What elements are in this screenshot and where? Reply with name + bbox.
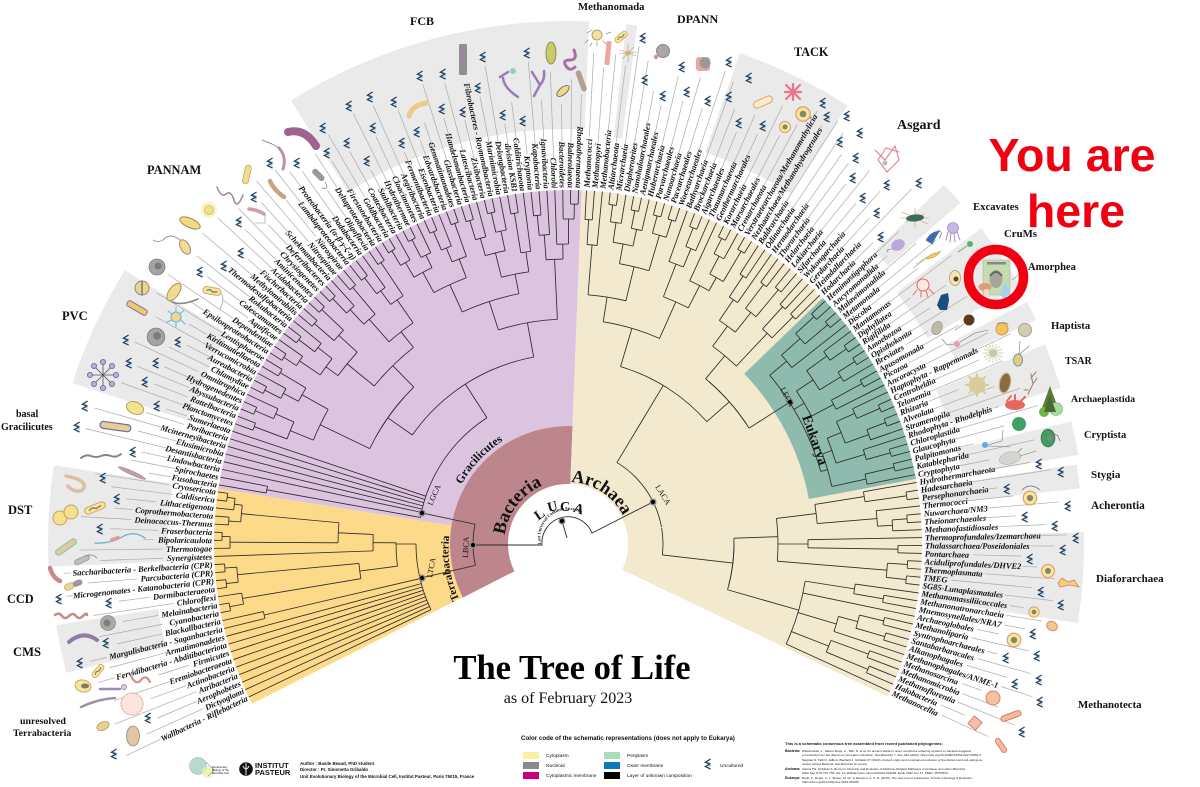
labels: Gracilicutes phyla: Desantisbacteria — [164, 444, 223, 466]
heading: unresolved Terrabacteria: Terrabacteria — [13, 728, 71, 739]
labels: Eukarya lineages: Ancoracysta — [884, 361, 927, 389]
panel: you-are-here portrait — [978, 260, 1022, 300]
heading: clade ring names: LGCA — [426, 483, 443, 507]
labels: Terrabacteria phyla: Armatimonadetes — [163, 633, 226, 658]
panel: tree sectors — [159, 141, 958, 704]
labels: Gracilicutes phyla: Elusimicrobia — [174, 437, 225, 458]
heading: clade ring names: Terrabacteria — [441, 536, 459, 602]
labels: Eukarya lineages: Rigifilida — [859, 321, 892, 347]
text block: references: Witwinowski, J., Sartori-Rupp, A., Taib, N. et al. An ancient divide in outer membrane tethering systems in bacteria suggests — [802, 749, 971, 753]
labels: lower Archaea lineages: Persephonarchaeia — [921, 485, 989, 503]
labels: Eukarya lineages: Breviates — [873, 343, 906, 367]
labels: Gracilicutes phyla: Deferribacteres — [283, 242, 327, 288]
labels: upper Archaea lineages: Thorarchaeia — [776, 216, 812, 259]
heading: clade ring names: LBCA — [461, 536, 471, 558]
logo: Institut Pasteur — [239, 761, 291, 777]
labels: Terrabacteria phyla: Fraserbacteria — [160, 526, 212, 537]
text block: references: This is a schematic consensus tree assembled from recent published phylogenies: — [785, 741, 943, 746]
labels: upper Archaea lineages: Nanohaloarchaeales — [630, 122, 653, 195]
legend: colour code: Cytoplasm — [546, 753, 569, 759]
heading: PANNAM: PANNAM — [147, 163, 201, 177]
labels: Gracilicutes phyla: Verrucomicrobia — [203, 341, 258, 377]
labels: Gracilicutes phyla: Balneolaeota — [566, 141, 575, 188]
labels: Gracilicutes phyla: Dependentiae — [230, 315, 275, 349]
labels: Gracilicutes phyla: Edwardsbacteria — [421, 153, 449, 211]
heading: Haptista: Haptista — [1051, 320, 1091, 332]
labels: lower Archaea lineages — [784, 458, 1067, 741]
heading: TACK: TACK — [794, 45, 829, 59]
labels: Gracilicutes phyla: Thermodesulfobacteria — [226, 266, 294, 323]
heading: clade ring names: Gracilicutes — [456, 436, 502, 483]
labels: Terrabacteria phyla: Melainabacteria — [160, 601, 218, 620]
labels: Terrabacteria phyla: Saccharibacteria - Berkelbacteria (CPR) — [72, 561, 213, 578]
labels: Gracilicutes phyla: Rokubacteria — [246, 293, 289, 330]
heading: Amorphea: Amorphea — [1028, 262, 1077, 273]
labels: Terrabacteria phyla: Synergistetes — [167, 553, 212, 563]
text block: authors — [300, 761, 475, 779]
labels: upper Archaea lineages: Heimdallarchaeia — [813, 240, 863, 292]
labels: Eukarya lineages: Ancyromonadida — [830, 262, 880, 309]
labels: Gracilicutes phyla: Rhodothermaeota — [574, 125, 584, 188]
labels: Gracilicutes phyla: Chrysiogenetes — [278, 250, 321, 293]
labels: upper Archaea lineages: Diapherotrites — [622, 142, 640, 194]
labels: Gracilicutes phyla: Chlamydiae — [209, 364, 251, 391]
text block: references: Garcia PS, Gribaldo S, Borrel G. Diversity and Evolution of Methane-Related Pathways in Archaea. Annu Rev Microbiol. — [802, 767, 966, 771]
labels: Terrabacteria phyla: Microgenomates - Katanobacteria (CPR) — [72, 577, 215, 601]
heading: PVC: PVC — [62, 309, 88, 323]
labels: lower Archaea lineages: Archaeoglobales — [915, 613, 975, 634]
labels: lower Archaea lineages: Methanoliparia — [914, 621, 969, 642]
labels: Gracilicutes phyla: Cloacimonetes — [390, 174, 420, 224]
labels: Eukarya lineages: Picozoa — [881, 360, 909, 381]
icons: eukaryotic organisms — [887, 208, 1062, 466]
labels: Eukarya lineages: Rhodophyta - Rhodelphis — [906, 405, 993, 440]
labels: Terrabacteria phyla: Parcubacteria (CPR) — [140, 569, 214, 584]
labels: Gracilicutes phyla: Calescamantes — [237, 298, 284, 336]
labels: Terrabacteria phyla: Blackallbacteria — [163, 617, 222, 638]
legend: colour code: Color code of the schematic representations (does not apply to Eukarya) — [521, 735, 735, 742]
legend: colour code: Cytoplasmic membrane — [546, 773, 597, 779]
labels: Gracilicutes phyla: Kapabacteria — [530, 142, 543, 190]
legend: colour code: Periplasm — [627, 753, 648, 759]
labels: Eukarya lineages: Diphyllatea — [855, 309, 893, 340]
labels: Gracilicutes phyla: Rattelbacteria — [188, 394, 237, 420]
labels: lower Archaea lineages: Nuwarchaea/NM3 — [922, 504, 988, 519]
labels: Gracilicutes phyla: Chlorobi — [549, 157, 559, 189]
heading: clade ring names: Bacteria — [493, 479, 542, 535]
logo: lab emblem: Microbial Cell — [212, 771, 229, 775]
labels: Gracilicutes phyla: Sumerlaeota — [187, 413, 232, 435]
labels: upper Archaea lineages: Odinarchaeia — [763, 206, 797, 250]
heading: unresolved Terrabacteria: unresolved — [20, 716, 66, 727]
labels: upper Archaea lineages: Hermodarchaeia — [769, 202, 811, 256]
heading: Cryptista: Cryptista — [1084, 430, 1127, 441]
labels: Gracilicutes phyla: Bacteroidetes — [557, 140, 567, 188]
labels: Gracilicutes phyla: Oligoflexia — [342, 215, 371, 252]
heading: Methanomada: Methanomada — [578, 1, 645, 13]
labels: Gracilicutes phyla: Fusobacteria — [170, 473, 218, 490]
labels: Gracilicutes phyla: Dadabacteria — [330, 213, 365, 257]
labels: upper Archaea lineages: Baldrarchaeia — [756, 199, 791, 246]
labels: Gracilicutes phyla: Kryptonia — [522, 154, 535, 190]
heading: Methanotecta: Methanotecta — [1078, 699, 1142, 711]
heading: clade ring names — [425, 386, 830, 602]
labels: Eukarya lineages: Amoebozoa — [864, 324, 903, 354]
labels: lower Archaea lineages: SG85-Lunaplasmatales — [922, 581, 1003, 600]
labels: Gracilicutes phyla: Delongbacteria — [493, 139, 511, 194]
labels: Gracilicutes phyla: Glassbacteria — [442, 159, 465, 206]
labels: lower Archaea lineages: Hadesarchaeia — [919, 478, 973, 495]
labels: Eukarya lineages: Chloroplastida — [909, 425, 961, 448]
labels: Terrabacteria phyla: Dormibacteraeota — [152, 585, 215, 602]
panel: grey clade bands — [44, 0, 1086, 673]
labels: lower Archaea lineages: Thermoplasmata — [924, 565, 983, 579]
labels: Eukarya lineages — [789, 229, 1039, 489]
legend: colour code: Outer membrane — [627, 763, 664, 769]
labels: upper Archaea lineages: Altiarchaeota — [606, 142, 621, 191]
labels: Terrabacteria phyla: Aerophobetes — [194, 679, 242, 706]
labels: upper Archaea lineages: Sifarchaeia — [795, 238, 828, 275]
labels: upper Archaea lineages: Verstraetearchaeota/Methanomethylicia — [743, 113, 819, 237]
labels: lower Archaea lineages: Methanomicrobia — [899, 667, 961, 697]
heading: clade ring names: Last Universal Common Ancestor — [538, 506, 582, 544]
labels: Gracilicutes phyla: Mcinerneyibacteria — [159, 423, 227, 451]
labels: lower Archaea lineages: Mnemosynellales/NRA7 — [917, 605, 1003, 629]
logo: lab emblem: Evolutionary — [212, 765, 228, 769]
heading: clade ring names: L — [532, 506, 548, 524]
callout: You are here: You are — [988, 129, 1156, 181]
labels: Gracilicutes phyla: Coatesbacteria — [366, 186, 398, 235]
labels: Gracilicutes phyla: Methylomirabilis — [248, 271, 299, 317]
text block: authors: Director : Pr. Simonetta Gribaldo — [300, 767, 368, 772]
labels: lower Archaea lineages: Methanoflorentia — [896, 674, 957, 706]
labels: Gracilicutes phyla: Kiritimatiellaeota — [204, 331, 262, 370]
logo: Institut Pasteur: INSTITUT — [255, 761, 289, 770]
labels: Eukarya lineages: Palpitomonas — [914, 443, 962, 463]
labels: Gracilicutes phyla: Aureabacteria — [205, 352, 254, 384]
labels: Gracilicutes phyla: Aminicenantes — [272, 256, 316, 299]
labels: lower Archaea lineages: Methanofastidiosales — [924, 523, 998, 535]
labels: lower Archaea lineages: Thermoprofundales/Izemarchaea — [925, 531, 1041, 543]
heading: Archaeplastida: Archaeplastida — [1071, 394, 1135, 405]
callout: red ring — [968, 250, 1024, 304]
labels: Gracilicutes phyla — [84, 61, 585, 517]
labels: Eukarya lineages: Rhizaria — [898, 398, 930, 418]
labels: lower Archaea lineages: Thalassarchaea/Poseidoniales — [925, 541, 1030, 551]
legend: colour code: Layer of unknown composition — [627, 773, 692, 779]
heading: DPANN: DPANN — [677, 12, 718, 26]
labels: lower Archaea lineages: Alkanophagales — [907, 644, 964, 669]
labels: Gracilicutes phyla: Fermentibacteria — [403, 158, 435, 217]
labels: upper Archaea lineages — [581, 45, 915, 323]
heading: clade ring names: U — [546, 499, 559, 516]
text block: references: Megrian D, Taib N, Jaffe A, Banfield J, Gribaldo S* (2022). Ancient origin and constrained evolution of the division and cell-wall gene — [802, 758, 983, 762]
text block: references: Bacteria: — [785, 749, 800, 753]
labels: Gracilicutes phyla: Zixibacteria — [469, 155, 488, 199]
text block: references: https://doi.org/10.1016/j.tree.2019.08.008 — [802, 780, 859, 784]
labels: lower Archaea lineages: Methanonatronarchaeia — [919, 597, 1005, 620]
labels: lower Archaea lineages: Methanophagales/ANME-1 — [905, 651, 999, 690]
labels: Gracilicutes phyla: Firestonebacteria — [344, 186, 385, 244]
labels: Eukarya lineages: Haptophyta - Rappemonads — [888, 346, 980, 396]
labels: Eukarya lineages: Cryptophyta — [917, 462, 961, 479]
text block: references — [785, 741, 983, 784]
heading: clade ring names: LECA — [778, 386, 796, 409]
labels: Gracilicutes phyla: Calditrichaeota — [511, 137, 527, 191]
labels: Eukarya lineages: Alveolata — [901, 405, 935, 425]
labels: Gracilicutes phyla: Acidobacteria — [268, 265, 310, 305]
labels: Eukarya lineages: Hemimastigophora — [824, 250, 879, 303]
labels: Terrabacteria phyla: Margulisbacteria - Saganbacteria — [107, 625, 223, 662]
labels: upper Archaea lineages: Methanococci — [583, 138, 594, 189]
heading: Diaforarchaea: Diaforarchaea — [1096, 573, 1164, 585]
heading: basal Gracilicutes: Gracilicutes — [1, 422, 53, 433]
heading: FCB: FCB — [410, 14, 434, 28]
labels: upper Archaea lineages: Thaumarchaeota — [707, 160, 739, 219]
text block: references: Burki, F., Roger, A. J., Brown, M. W., & Simpson, A. G. B. (2019). The new tree of eukaryotes. Trends in Ecology & Evolution, — [802, 776, 973, 780]
logo: Institut Pasteur: PASTEUR — [255, 768, 291, 777]
labels: upper Archaea lineages: Marsarchaeales — [728, 176, 762, 230]
heading: clade ring names: LTCA — [425, 557, 438, 578]
text block: authors: Unit Evolutionary Biology of the Microbial Cell, Institut Pasteur, Paris 75015, France — [300, 774, 475, 779]
labels: Terrabacteria phyla: Deinococcus-Thermus — [133, 516, 213, 529]
labels: Gracilicutes phyla: Aegiribacteria — [398, 171, 427, 221]
labels: Eukarya lineages: Malawimonadida — [835, 268, 887, 315]
heading: Asgard: Asgard — [897, 118, 941, 133]
heading: TSAR: TSAR — [1065, 356, 1092, 367]
heading: Acherontia: Acherontia — [1091, 500, 1145, 512]
labels: Eukarya lineages: Glaucophyta — [912, 435, 957, 456]
labels: Gracilicutes phyla: Ignavibacteria — [539, 137, 551, 189]
labels: Terrabacteria phyla: Bipolaricaulota — [157, 536, 212, 545]
labels: Terrabacteria phyla: Cyanobacteria — [169, 609, 220, 628]
chart: central LUCA connections — [473, 502, 653, 545]
legend: colour code: Uncultured — [720, 763, 744, 769]
labels: Terrabacteria phyla — [64, 470, 433, 760]
labels: lower Archaea lineages: Santabarbaracales — [910, 636, 975, 662]
nodes: ancestor markers — [419, 399, 793, 581]
labels: upper Archaea lineages: Aenigmarchaeales — [638, 131, 660, 197]
labels: lower Archaea lineages: Thermococci — [923, 497, 969, 511]
labels: upper Archaea lineages: Geothermarchaeales — [714, 153, 752, 222]
labels: Eukarya lineages: Centroheldia — [892, 376, 937, 403]
labels: Gracilicutes phyla: Deltaproteobacteria — [333, 185, 378, 248]
labels: Terrabacteria phyla: Lithacetigenota — [159, 498, 214, 513]
labels: Gracilicutes phyla: Epsilonproteobacteria — [201, 307, 271, 356]
labels: upper Archaea lineages: Methanopyri — [591, 142, 603, 189]
labels: Gracilicutes phyla: Nitrospinae — [305, 240, 339, 277]
labels: upper Archaea lineages: Huberarchaeia — [646, 144, 667, 199]
labels: Gracilicutes phyla: Handelsmanbacteria — [443, 131, 472, 204]
labels: Eukarya lineages: Discoba — [845, 303, 873, 328]
labels: upper Archaea lineages: Nezhaarchaea/Methanohydrogenales — [749, 126, 824, 242]
labels: lower Archaea lineages: Methanomassiliicoccales — [920, 589, 1008, 610]
heading: CCD: CCD — [7, 592, 34, 606]
labels: Gracilicutes phyla: Poribacteria — [186, 422, 229, 443]
labels: Gracilicutes phyla: Hydrogenedentes — [184, 373, 244, 405]
labels: Gracilicutes phyla: Schekmanbacteria — [284, 229, 333, 282]
icons: archaeal organisms — [585, 30, 1079, 753]
labels: Gracilicutes phyla: Lentisphaerae — [219, 329, 266, 363]
logo: lab emblem: Biology of the — [212, 768, 229, 772]
labels: Gracilicutes phyla: Stahlbacteria — [376, 186, 406, 231]
labels: upper Archaea lineages: Pacearchaeales — [669, 150, 694, 204]
labels: Eukarya lineages: Katablepharida — [915, 451, 970, 471]
text block: references: Archaea: — [785, 767, 800, 771]
labels: upper Archaea lineages: Nanoarchaeia — [661, 152, 684, 203]
text block: references: cluster across Bacteria. Nat Microbiol (in press). — [802, 762, 868, 766]
labels: upper Archaea lineages: Woesearchaeales — [677, 148, 704, 207]
labels: lower Archaea lineages: Syntrophoarchaeales — [913, 629, 986, 656]
labels: upper Archaea lineages: Brockarchaeia — [692, 161, 719, 213]
labels: upper Archaea lineages: Crenarchaeota — [736, 183, 768, 233]
labels: upper Archaea lineages: Aigarchaeales — [699, 166, 726, 216]
labels: Gracilicutes phyla: Planctomycetes — [181, 401, 235, 428]
labels: lower Archaea lineages: Methanocellia — [890, 689, 939, 718]
labels: Gracilicutes phyla: Latescibacteria — [457, 147, 480, 201]
icons: bacterial organisms — [50, 42, 588, 746]
labels: Gracilicutes phyla: Proteobacteria (α-β-γ-ζ-η) — [297, 184, 358, 262]
labels: Terrabacteria phyla: Chloroflexi — [176, 593, 217, 608]
labels: Terrabacteria phyla: Wallbacteria - Riflebacteria — [159, 694, 249, 743]
heading: basal Gracilicutes: basal — [16, 409, 38, 420]
heading: Excavates: Excavates — [973, 201, 1019, 213]
labels: Eukarya lineages: Metamonada — [840, 285, 882, 321]
labels: Gracilicutes phyla: Omnitrophica — [199, 369, 247, 398]
labels: Terrabacteria phyla: Coprothermobacterota — [135, 506, 213, 521]
labels: Gracilicutes phyla: Eisenbacteria — [416, 166, 442, 214]
text block: references: Eukarya: — [785, 776, 800, 780]
labels: upper Archaea lineages: Micrarchaeia — [614, 143, 630, 192]
labels: Eukarya lineages: Stramenopila — [904, 409, 951, 432]
labels: Gracilicutes phyla: Aquificae — [246, 315, 280, 343]
labels: lower Archaea lineages: Aciduliprofundales/DHVE2 — [923, 557, 1021, 571]
labels: lower Archaea lineages: Halobacteria — [893, 681, 939, 708]
labels: Gracilicutes phyla: Lindowbacteria — [165, 453, 221, 474]
title: The Tree of Life — [453, 649, 691, 687]
labels: upper Archaea lineages: Gerdarchaeia — [807, 244, 846, 285]
labels: Terrabacteria phyla: Firmicutes — [191, 649, 230, 669]
labels: lower Archaea lineages: TMEG — [923, 573, 948, 585]
labels: Gracilicutes phyla: Lambdaproteobacteria — [296, 199, 352, 267]
labels: Gracilicutes phyla: Abyssubacteria — [188, 384, 240, 413]
labels: lower Archaea lineages: Methanosarcina — [902, 659, 959, 687]
labels: Gracilicutes phyla: Gemmatimonadetes — [426, 141, 457, 209]
labels: Eukarya lineages: Mantamonas — [850, 299, 893, 334]
labels: Eukarya lineages: Telonemia — [895, 388, 932, 410]
labels: Terrabacteria phyla: Eremiobacteraeota — [167, 656, 233, 687]
labels: Gracilicutes phyla: Marinimicrobia — [484, 139, 503, 196]
labels: lower Archaea lineages: Hydrothermarchaeota — [918, 465, 996, 487]
legend: colour code — [521, 735, 744, 779]
labels: Gracilicutes phyla: Spirochaetes — [174, 465, 219, 482]
labels: upper Archaea lineages: Methanobacteria — [599, 129, 613, 190]
subtitle: as of February 2023 — [504, 690, 632, 707]
chart: phylogenetic tree branches — [212, 191, 921, 750]
labels: upper Archaea lineages: Korarchaeia — [721, 183, 749, 226]
labels: Terrabacteria phyla: Dictyoglomi — [203, 687, 246, 713]
text block: authors: Author : Basile Beaud, PhD student — [300, 761, 375, 766]
labels: Terrabacteria phyla: Fervidibacteria - Abditibacteriota — [114, 641, 228, 682]
text block: references: 2022 Sep 8;76:727-755. doi: 10.1146/annurev-micro-041020-024935. Epub 2022 Jun 27. PMID: 35759872. — [802, 771, 949, 775]
heading: CruMs: CruMs — [1004, 228, 1037, 240]
labels: Terrabacteria phyla: Atribacteria — [196, 672, 239, 696]
labels: Terrabacteria phyla: Actinobacteria — [184, 664, 236, 691]
labels: upper Archaea lineages: Hodarchaeia — [818, 258, 858, 297]
labels: Terrabacteria phyla: Thermotogae — [166, 544, 212, 554]
labels: upper Archaea lineages: Parvarchaeales — [654, 146, 676, 200]
legend: colour code: Nucleoid — [546, 763, 565, 769]
labels: Gracilicutes phyla: Goldbacteria — [361, 196, 392, 239]
labels: lower Archaea lineages: Theionarchaeales — [924, 514, 986, 527]
heading: clade ring names: Archaea — [571, 470, 629, 516]
labels: Gracilicutes phyla: Fischerbacteria — [257, 267, 305, 311]
labels: Terrabacteria phyla: Caldiserica — [175, 491, 215, 505]
callout: You are here: here — [1027, 185, 1125, 237]
labels: Gracilicutes phyla: Hydrothermae — [382, 178, 413, 228]
labels: Eukarya lineages: Opisthokonta — [869, 328, 913, 360]
labels: upper Archaea lineages: Lokiarchaeia — [789, 228, 825, 270]
labels: upper Archaea lineages: Bathyarchaeia — [684, 159, 710, 210]
icons: uncultured lineage markers — [56, 33, 1079, 759]
text block: references: a mechanism for the diderm-to-monoderm transition. Nat Microbiol 7, 411–422 (2022). https://doi.org/10.1038/s41564-022-01066-3 — [802, 753, 981, 757]
labels: upper Archaea lineages: Wukongarchaeia — [802, 230, 847, 280]
heading: DST: DST — [8, 503, 33, 517]
heading: CMS: CMS — [13, 645, 41, 659]
heading: Stygia: Stygia — [1091, 469, 1121, 481]
labels: Terrabacteria phyla: Cryosericota — [172, 481, 216, 497]
heading: clade ring names: A — [571, 501, 586, 519]
logo: lab emblem — [190, 758, 229, 778]
labels: Gracilicutes phyla: Nitrospirae — [313, 235, 346, 272]
labels: upper Archaea lineages: Helarchaeia — [782, 225, 816, 265]
labels: Eukarya lineages: Apusomonada — [877, 342, 925, 374]
callout: You are here — [988, 129, 1156, 237]
heading: clade ring names: C — [560, 500, 570, 515]
labels: lower Archaea lineages: Pontarchaea — [925, 550, 969, 560]
labels: Gracilicutes phyla: Fibrobacteres - Raymondbacteria — [462, 81, 495, 197]
labels: Gracilicutes phyla: division KSB1 — [503, 143, 519, 193]
heading: clade ring names: LACA — [653, 483, 673, 507]
heading: clade ring names: Eukarya — [798, 413, 830, 467]
